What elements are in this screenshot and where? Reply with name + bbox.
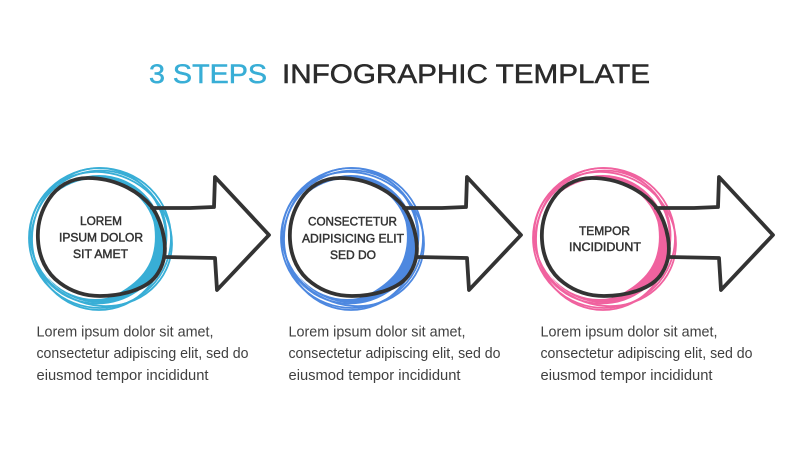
description: consectetur adipiscing elit, sed do: [540, 346, 752, 362]
description: [540, 324, 752, 384]
title: [149, 59, 650, 89]
arrow: [404, 177, 521, 290]
description: eiusmod tempor incididunt: [540, 368, 712, 384]
title: 3 STEPS: [149, 59, 267, 89]
description: Lorem ipsum dolor sit amet,: [36, 324, 214, 340]
panel: step 2: [259, 146, 521, 384]
circle label: SED DO: [330, 248, 376, 262]
arrow: [656, 177, 773, 290]
description: eiusmod tempor incididunt: [288, 368, 460, 384]
title: INFOGRAPHIC TEMPLATE: [282, 59, 650, 89]
scribble circle: pink: [511, 146, 698, 329]
panel: step 3: [511, 146, 773, 384]
description: Lorem ipsum dolor sit amet,: [540, 324, 718, 340]
scribble circle: periwinkle blue: [259, 146, 446, 329]
panel: step 1: [7, 146, 269, 384]
circle label: CONSECTETUR: [308, 214, 397, 228]
arrow: [152, 177, 269, 290]
circle label: SIT AMET: [73, 247, 128, 261]
description: consectetur adipiscing elit, sed do: [36, 346, 248, 362]
circle label: [302, 214, 404, 262]
circle label: [59, 214, 143, 261]
circle label: LOREM: [80, 214, 122, 228]
description: Lorem ipsum dolor sit amet,: [288, 324, 466, 340]
description: eiusmod tempor incididunt: [36, 368, 209, 384]
hand-drawn circle outline: [290, 178, 417, 296]
hand-drawn circle outline: [38, 178, 165, 296]
scribble circle: blue: [7, 146, 194, 329]
circle label: TEMPOR: [579, 224, 630, 238]
circle label: IPSUM DOLOR: [59, 230, 143, 244]
circle label: ADIPISICING ELIT: [302, 232, 404, 246]
circle label: INCIDIDUNT: [569, 240, 641, 254]
description: [288, 324, 500, 384]
hand-drawn circle outline: [542, 178, 669, 296]
description: consectetur adipiscing elit, sed do: [288, 346, 500, 362]
description: [36, 324, 248, 384]
circle label: [569, 224, 641, 254]
